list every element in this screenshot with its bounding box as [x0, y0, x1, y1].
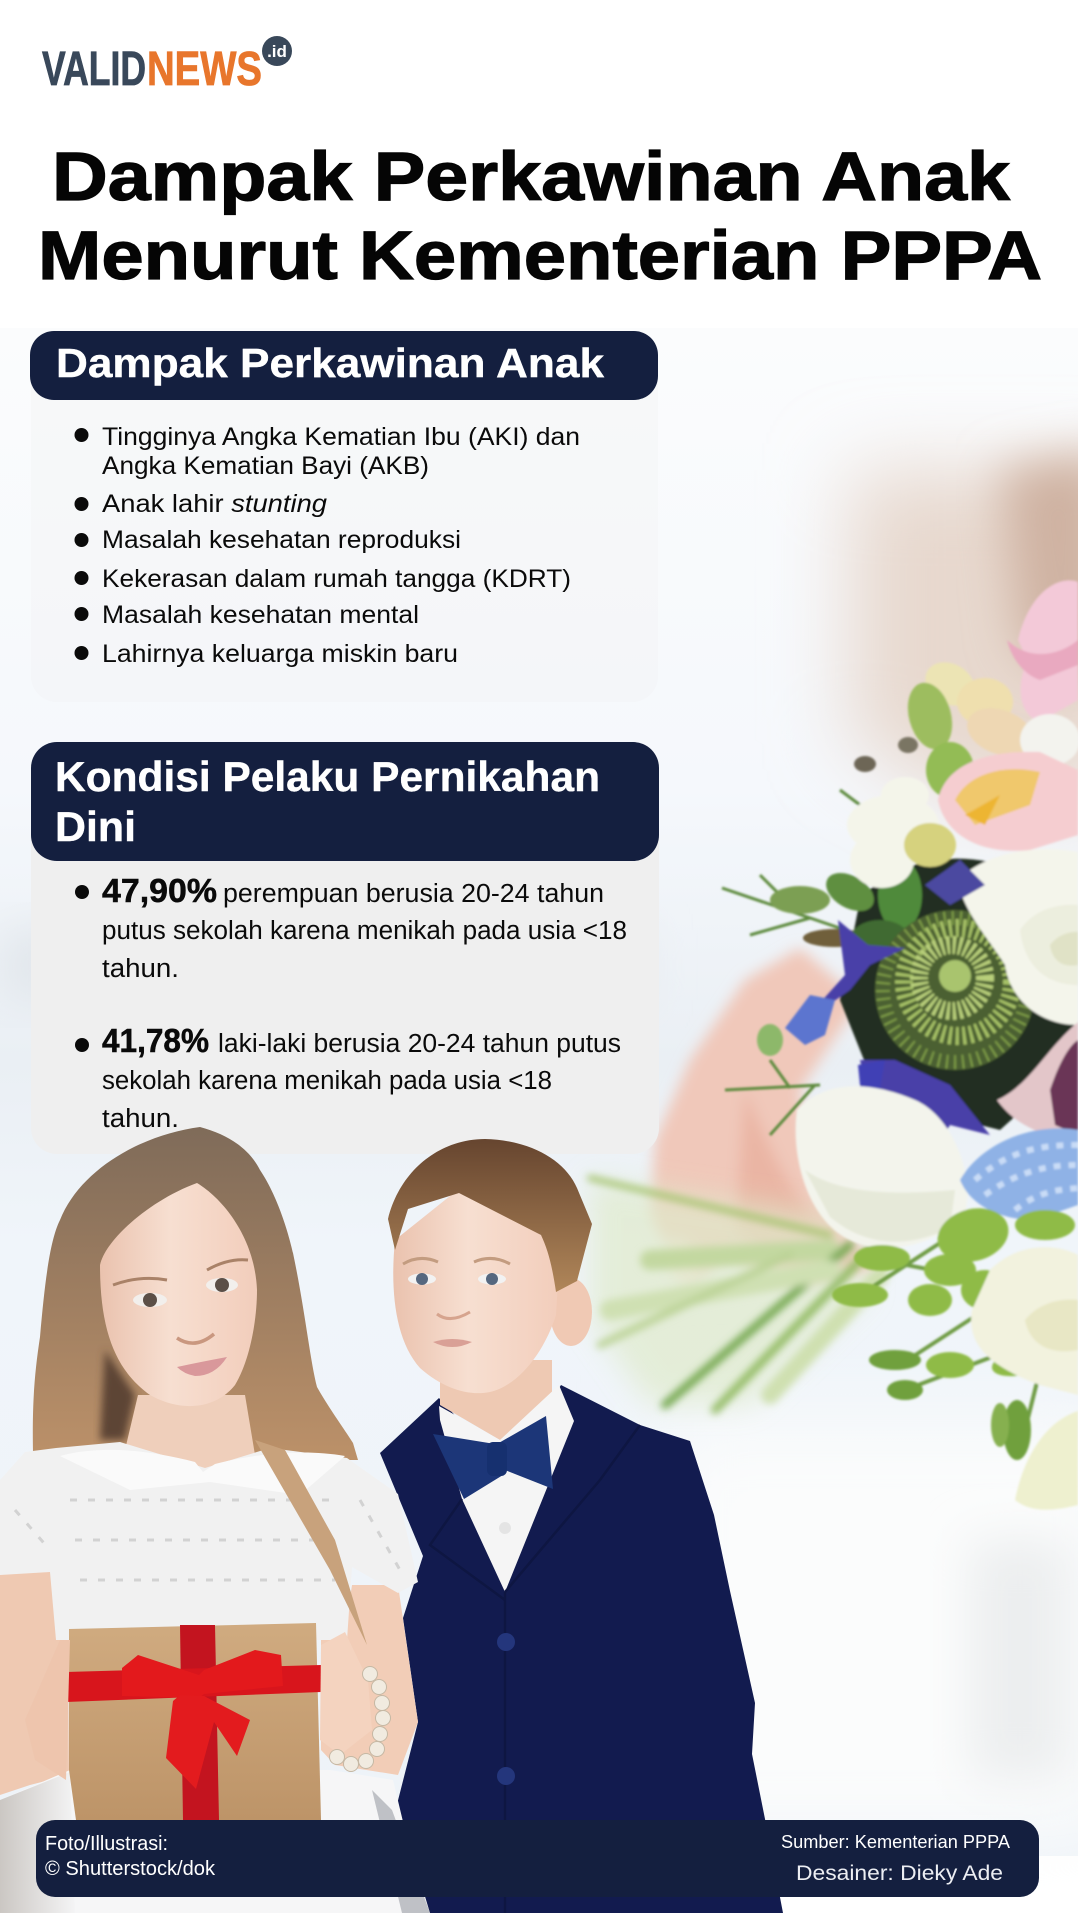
heading [55, 753, 600, 850]
pearl bracelet [330, 1666, 390, 1772]
bullet list [74, 423, 580, 668]
icon: blue muscari [960, 1128, 1078, 1220]
source and designer: Desainer: Dieky Ade [796, 1862, 1003, 1885]
gift box [66, 1623, 321, 1820]
thin front hair strand [255, 1440, 367, 1645]
statistic: laki-laki 41,78%: laki-laki berusia 20-24 tahun putus [218, 1030, 621, 1058]
statistic: perempuan 47,90%: 47,90% [102, 872, 217, 909]
collar [60, 1450, 345, 1495]
icon: lower white rose [971, 1247, 1078, 1395]
eyes [403, 1258, 510, 1285]
heading bar [31, 742, 659, 861]
left hand on gift [25, 1640, 70, 1780]
face [393, 1180, 560, 1393]
source and designer: Sumber: Kementerian PPPA [781, 1831, 1011, 1852]
statistic: laki-laki 41,78% [75, 1022, 621, 1133]
ribbon [180, 1625, 219, 1820]
icon: cream and green buds [854, 654, 1078, 798]
statistic: laki-laki 41,78%: sekolah karena menikah pada usia <18 [102, 1067, 552, 1095]
bullet list: Masalah kesehatan mental [102, 601, 419, 629]
lapel shadow lines [430, 1425, 640, 1913]
photo credit: © Shutterstock/dok [45, 1858, 216, 1880]
panel: dampak perkawinan anak [30, 331, 658, 702]
nose and mouth [433, 1312, 472, 1347]
source and designer [781, 1831, 1011, 1885]
blurred stems of bouquet [590, 1178, 880, 1410]
icon: green sprigs [722, 790, 880, 1135]
flower bouquet [722, 580, 1078, 1510]
dress bodice [0, 1442, 418, 1640]
panel: kondisi pelaku pernikahan dini [31, 742, 659, 1154]
icon: pink rose [1007, 580, 1078, 722]
icon: small white blossoms [847, 777, 956, 888]
bow tie [433, 1416, 553, 1499]
title: Menurut Kementerian PPPA [38, 217, 1042, 294]
bullet list: Masalah kesehatan reproduksi [102, 526, 461, 554]
heading bar [30, 331, 658, 400]
title [38, 138, 1042, 294]
statistic: perempuan 47,90% [75, 872, 627, 983]
buttons [497, 1522, 515, 1785]
neck [440, 1360, 552, 1440]
icon: white lisianthus [796, 1086, 967, 1248]
icon: large white rose [957, 849, 1078, 1025]
icon: green chrysanthemum [875, 910, 1035, 1070]
hair back [33, 1127, 358, 1460]
neck [125, 1395, 255, 1475]
photo credit: Foto/Illustrasi: [45, 1833, 168, 1855]
ear [550, 1278, 592, 1346]
bullet list: Angka Kematian Bayi (AKB) [102, 452, 429, 480]
statistic: perempuan 47,90%: putus sekolah karena menikah pada usia <18 [102, 917, 627, 945]
bullet list: Lahirnya keluarga miskin baru [102, 640, 458, 668]
logo: Validnews.id: NEWS [147, 43, 262, 96]
bullet list: Kekerasan dalam rumah tangga (KDRT) [102, 565, 571, 593]
logo: Validnews.id: .id [267, 42, 287, 61]
embroidery [15, 1500, 400, 1580]
bullet list: Tingginya Angka Kematian Ibu (AKI) dan [102, 423, 580, 451]
logo: Validnews.id [42, 36, 292, 96]
bullet list: Anak lahir stunting [102, 490, 327, 518]
face [100, 1183, 257, 1406]
logo: Validnews.id: VALID [42, 43, 146, 96]
statistic: perempuan 47,90%: perempuan berusia 20-24 tahun [223, 880, 604, 908]
heading: Dini [55, 803, 136, 850]
dark hair shadow under cheek [100, 1350, 135, 1440]
dress skirt [0, 1770, 430, 1913]
heading: Kondisi Pelaku Pernikahan [55, 753, 600, 800]
footer bar [36, 1820, 1039, 1897]
title: Dampak Perkawinan Anak [52, 138, 1011, 215]
jacket [380, 1385, 783, 1913]
blurred photo background [0, 328, 1078, 1856]
eyes [113, 1260, 248, 1307]
statistic: laki-laki 41,78%: 41,78% [102, 1022, 209, 1059]
statistic: perempuan 47,90%: tahun. [102, 955, 179, 983]
icon: cream bud [1015, 1411, 1078, 1510]
icon: green stems and freesia buds [832, 1201, 1075, 1460]
dark foliage base [840, 859, 1078, 1130]
illustration: boy in navy suit [380, 1139, 783, 1913]
hair [388, 1139, 592, 1292]
heading: Dampak Perkawinan Anak [56, 340, 604, 386]
icon: mauve tulip [997, 1022, 1078, 1143]
icon: yellow pink flower [938, 752, 1078, 851]
blurred hand holding bouquet [650, 948, 880, 1291]
icon: leaves [757, 859, 922, 1056]
shirt [439, 1385, 574, 1592]
statistic: laki-laki 41,78%: tahun. [102, 1105, 179, 1133]
nose and mouth [177, 1334, 227, 1376]
right hand on gift [320, 1632, 372, 1755]
illustration: girl in white dress holding gift [0, 1127, 430, 1913]
bow [122, 1650, 283, 1698]
icon: purple flowers [785, 860, 990, 1165]
photo credit [45, 1833, 216, 1880]
bare arms [0, 1560, 69, 1795]
